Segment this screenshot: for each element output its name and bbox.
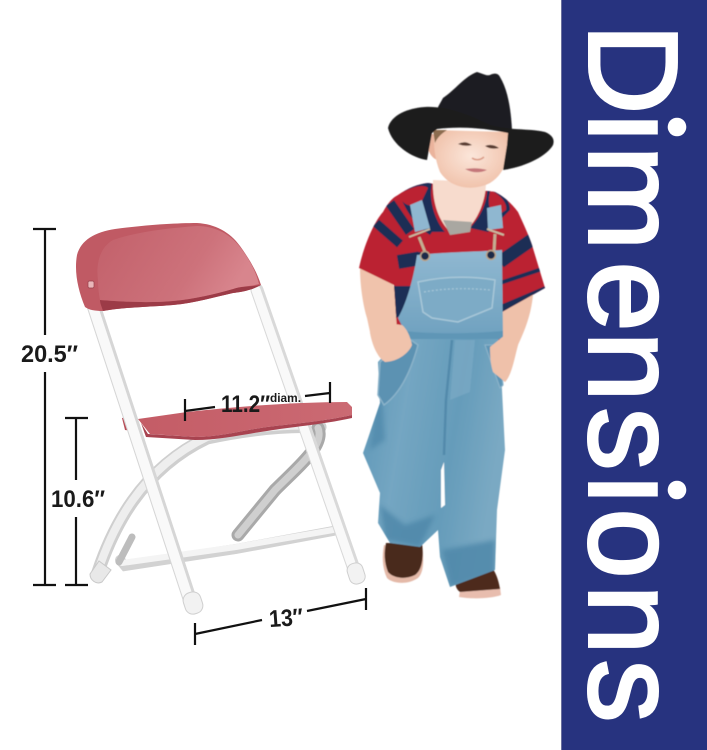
banner panel	[561, 0, 707, 750]
shirt collar	[402, 182, 445, 236]
dimension: seat diameter 11.2 in: 11.2″	[221, 391, 270, 418]
boy hands	[370, 322, 518, 382]
boy arms	[360, 268, 533, 382]
chair backrest	[76, 223, 261, 311]
chair seat	[122, 402, 352, 440]
dimension: seat height 10.6 in	[51, 418, 105, 585]
first i round dot	[664, 118, 687, 137]
dimension: seat diameter 11.2 in	[185, 382, 330, 421]
dimension: chair width 13 in: 13″	[268, 604, 304, 633]
boy overalls legs	[363, 330, 505, 587]
overalls bib	[398, 250, 503, 339]
chair left foot	[181, 590, 205, 616]
dimension: chair width 13 in	[195, 588, 366, 645]
banner heading: Dimensions: Dimensions	[562, 24, 704, 722]
boy hair	[433, 130, 447, 143]
boy in cowboy hat and overalls	[355, 72, 554, 598]
boy striped shirt	[355, 180, 552, 345]
boy eyes	[458, 142, 499, 149]
folding chair	[76, 223, 367, 616]
second i round dot	[664, 481, 687, 500]
chair backrest rivet	[88, 281, 94, 288]
center seam	[444, 340, 452, 455]
boy hat	[388, 72, 554, 170]
dimension: chair height 20.5 in: 20.5″	[21, 341, 78, 368]
boy nose	[472, 157, 484, 160]
shirt placket	[443, 220, 472, 235]
boy shoes	[383, 543, 501, 598]
chair right post	[256, 290, 355, 572]
boy neck and face	[426, 130, 509, 235]
boy mouth	[465, 168, 487, 172]
gap between legs	[441, 462, 445, 508]
pockets	[378, 338, 418, 405]
chair foot rear left	[90, 561, 111, 583]
dimension: seat diameter 11.2 in: diam.	[270, 393, 301, 405]
dimension: chair height 20.5 in	[21, 229, 78, 585]
overalls straps and buckles	[409, 200, 504, 252]
chair curved rear frame	[98, 426, 333, 572]
chair long left post	[93, 307, 190, 600]
dimension: seat height 10.6 in: 10.6″	[51, 486, 105, 513]
chair right foot	[345, 561, 367, 586]
